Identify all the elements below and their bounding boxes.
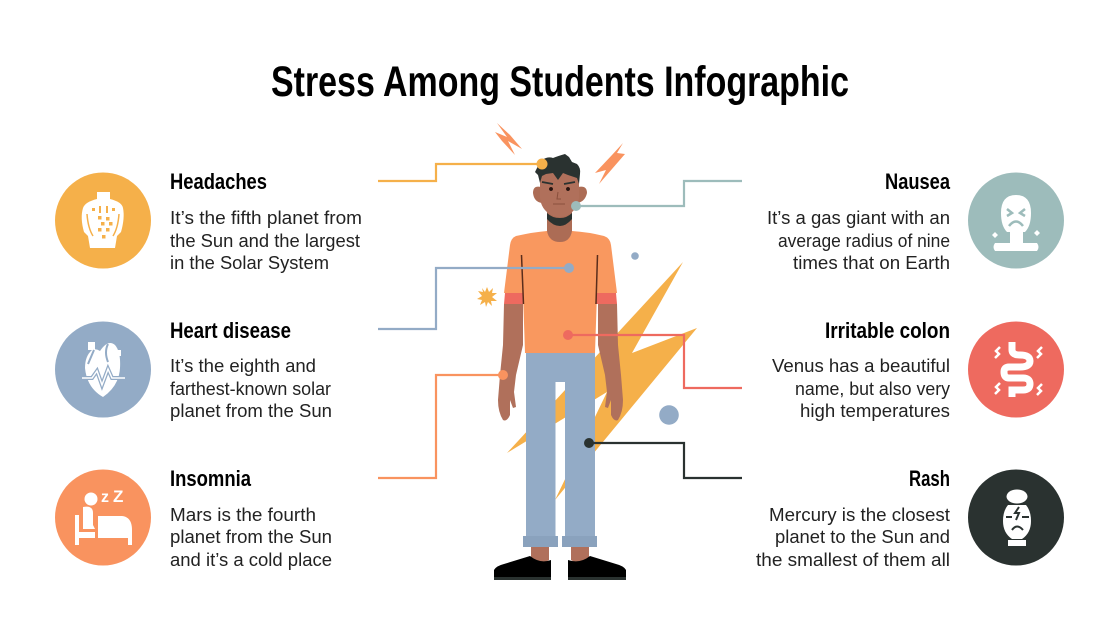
neck	[547, 210, 572, 242]
heading: nausea: Nausea	[885, 169, 951, 194]
connector: rash	[584, 438, 742, 478]
small dot	[631, 252, 639, 260]
text: headaches: the Sun and the largest	[170, 231, 360, 251]
icon: heart disease	[55, 322, 151, 418]
heading: rash: Rash	[909, 466, 950, 491]
shoes	[494, 556, 626, 577]
shirt fold lines	[522, 255, 598, 304]
arms and hands	[498, 304, 623, 420]
nose and mouth	[553, 192, 565, 204]
connector: nausea	[571, 181, 742, 211]
hair	[535, 154, 580, 184]
heading: insomnia: Insomnia	[170, 466, 252, 491]
icon: nausea	[968, 172, 1064, 268]
text: heart disease: planet from the Sun	[170, 401, 332, 421]
text: rash: the smallest of them all	[756, 550, 950, 570]
eyes	[549, 187, 570, 191]
heading: heart disease: Heart disease	[170, 318, 291, 343]
text: headaches: in the Solar System	[170, 253, 329, 273]
background lightning bolt	[507, 262, 697, 500]
text: irritable colon: high temperatures	[800, 401, 950, 421]
text: nausea: It’s a gas giant with an	[767, 208, 950, 228]
text: insomnia: Mars is the fourth	[170, 505, 316, 525]
text: headaches: It’s the fifth planet from	[170, 208, 362, 228]
connector: irritable colon	[563, 330, 742, 388]
text: irritable colon: name, but also very	[795, 379, 950, 399]
text: insomnia: planet from the Sun	[170, 527, 332, 547]
text: insomnia: and it’s a cold place	[170, 550, 332, 570]
icon: starburst	[477, 287, 497, 307]
title: Stress Among Students Infographic	[271, 58, 849, 106]
sleep letters: z	[101, 489, 109, 506]
eyebrows	[542, 182, 575, 184]
text: rash: Mercury is the closest	[769, 505, 950, 525]
icon: insomnia (person in bed)	[55, 470, 151, 566]
ears	[533, 187, 587, 203]
icon: irritable colon	[968, 322, 1064, 418]
beard	[547, 213, 572, 226]
shirt	[504, 231, 617, 353]
text: nausea: times that on Earth	[793, 253, 950, 273]
icon: small bolt left of head	[495, 123, 522, 155]
pants	[526, 353, 595, 537]
sleeve bands	[504, 293, 617, 304]
icon: headaches (back)	[55, 172, 151, 268]
ankles	[531, 547, 589, 563]
sleep letter large: Z	[113, 487, 123, 506]
large dot	[659, 405, 679, 425]
text: heart disease: farthest-known solar	[170, 379, 331, 399]
text: nausea: average radius of nine	[778, 231, 950, 251]
connector: insomnia	[378, 370, 508, 478]
text: rash: planet to the Sun and	[775, 527, 950, 547]
connector: headaches	[378, 158, 548, 181]
pant cuffs	[523, 536, 597, 547]
face	[540, 172, 579, 217]
heading: headaches: Headaches	[170, 169, 267, 194]
shoe soles	[494, 577, 626, 580]
text: heart disease: It’s the eighth and	[170, 356, 316, 376]
figure: stressed student	[494, 154, 626, 580]
icon: rash (head)	[968, 470, 1064, 566]
icon: small bolt right of head	[595, 143, 625, 184]
heading: irritable colon: Irritable colon	[825, 318, 950, 343]
text: irritable colon: Venus has a beautiful	[772, 356, 950, 376]
connector: heart disease	[378, 263, 574, 329]
